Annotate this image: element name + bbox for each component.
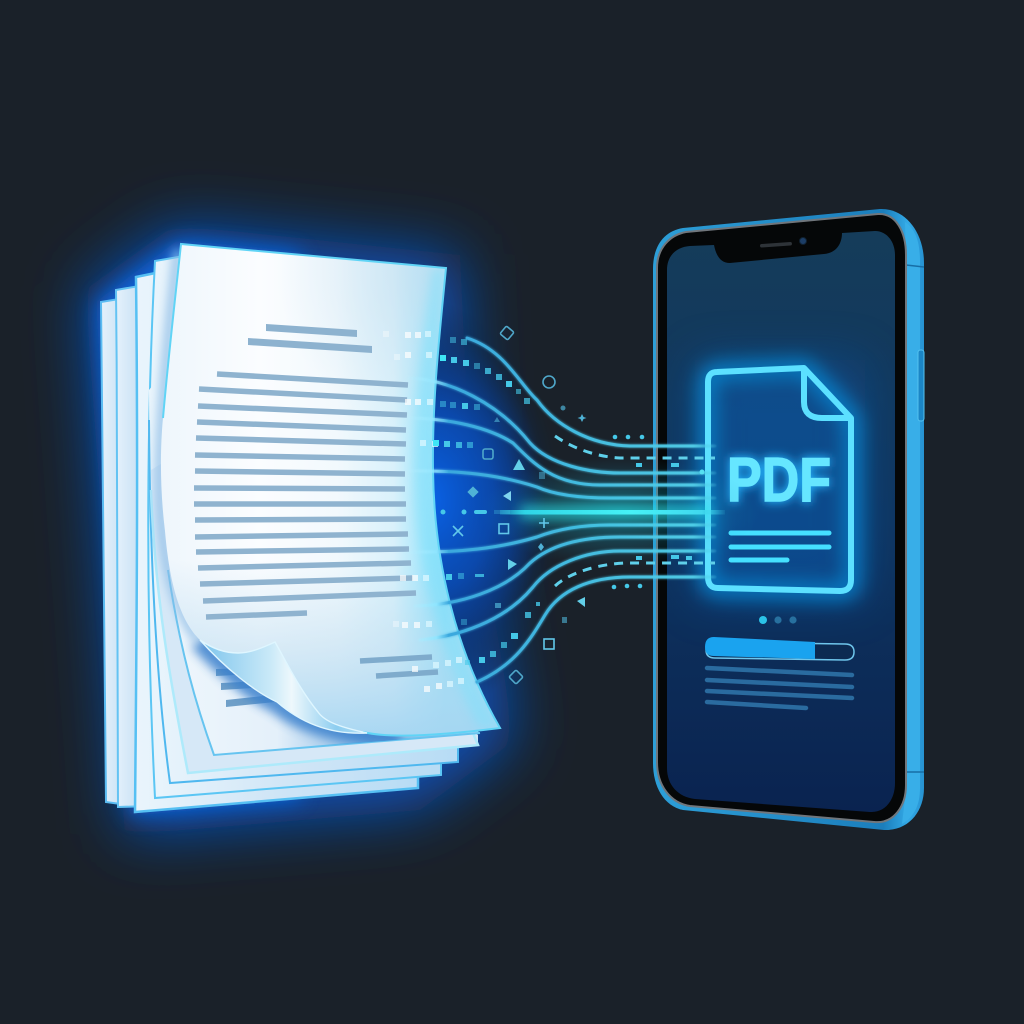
flow line 7 bbox=[420, 551, 715, 640]
flow line 6 bbox=[415, 537, 715, 606]
PDF icon text lines bbox=[731, 533, 829, 560]
front sheet tints bbox=[174, 258, 498, 734]
bezel bbox=[657, 214, 906, 822]
rear sheet 1 bbox=[101, 298, 135, 806]
PDF label glow: PDF bbox=[727, 446, 831, 515]
front sheet bbox=[161, 244, 500, 736]
flow line 1 bbox=[467, 338, 715, 446]
sheet under the curl bbox=[168, 570, 480, 755]
flow line 4 bbox=[405, 471, 715, 498]
flow line 2 bbox=[405, 378, 715, 473]
paper stack bbox=[101, 240, 510, 812]
sheet 6 bbox=[151, 440, 478, 773]
screen glow behind PDF icon bbox=[695, 360, 865, 600]
icon: square lower bbox=[544, 639, 554, 649]
PDF icon glow bbox=[707, 367, 853, 592]
sheet 5 bbox=[149, 340, 458, 783]
phone bbox=[653, 209, 924, 830]
rear sheet 2 bbox=[116, 285, 150, 807]
icon: square middle bbox=[499, 524, 508, 534]
camera bbox=[800, 238, 806, 244]
data flow lines bbox=[405, 338, 715, 682]
shadow of front sheet left edge bbox=[160, 250, 198, 640]
sheet 3 bbox=[135, 270, 418, 812]
icon: plus bbox=[539, 518, 549, 528]
page curl bbox=[200, 640, 367, 733]
flow line 5 bbox=[405, 525, 715, 552]
icon: circle bbox=[543, 376, 555, 388]
shadow cast under curl bbox=[200, 640, 400, 736]
blue glow behind paper stack bbox=[85, 225, 515, 835]
phone side band highlight bbox=[902, 222, 920, 824]
page indicator dots bbox=[759, 616, 797, 624]
center beam glow bbox=[520, 506, 710, 518]
icon: diamond bottom bbox=[509, 670, 523, 684]
phone screen text lines bbox=[707, 668, 852, 708]
front sheet outline bbox=[163, 244, 500, 736]
side button bbox=[918, 350, 924, 421]
small filled icons bbox=[467, 406, 586, 623]
heading lines bbox=[248, 324, 372, 353]
phone body bbox=[653, 209, 924, 830]
flow background glow bbox=[290, 300, 760, 720]
floating shape icons bbox=[453, 326, 586, 684]
center beam bbox=[500, 510, 725, 514]
PDF document icon bbox=[708, 368, 851, 591]
dotted data particles bbox=[433, 337, 704, 665]
flow line 8 bbox=[477, 577, 715, 682]
sheet 4 bbox=[148, 255, 441, 798]
squares dissolving on the sheet bbox=[383, 331, 464, 692]
antenna bands bbox=[906, 265, 924, 772]
footer text lines bbox=[360, 657, 438, 676]
icon: square upper bbox=[483, 449, 493, 459]
body text lines bbox=[194, 374, 416, 617]
icon: diamond top bbox=[500, 326, 514, 340]
PDF label: PDF bbox=[727, 446, 831, 515]
speaker bbox=[760, 242, 792, 248]
text lines on sheet under curl bbox=[216, 668, 285, 707]
flow line 3 bbox=[405, 418, 715, 485]
screen bbox=[667, 231, 895, 812]
dashed transfer streams bbox=[555, 436, 715, 586]
progress bar bbox=[705, 637, 854, 660]
icon: x mark bbox=[453, 526, 463, 536]
